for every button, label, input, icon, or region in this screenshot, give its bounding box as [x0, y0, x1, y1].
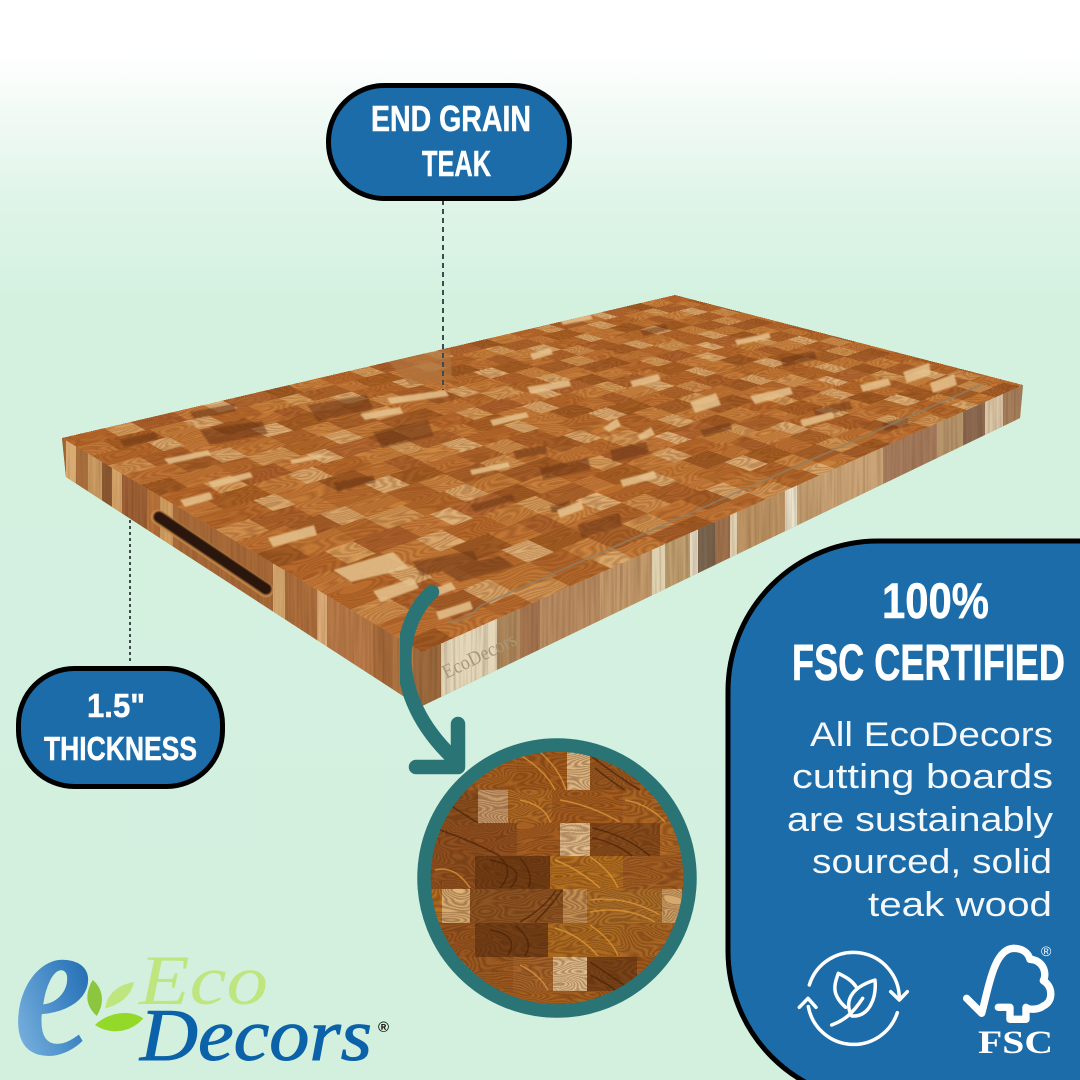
heading: [792, 573, 1065, 691]
body text: teak wood: [868, 886, 1052, 924]
logo: EcoDecors: ®: [378, 1019, 389, 1036]
body text: sourced, solid: [812, 843, 1052, 881]
callout: end grain teak: [326, 83, 572, 201]
body text: [787, 716, 1053, 924]
dotted leader: thickness: [129, 520, 131, 661]
logo: EcoDecors: [14, 950, 389, 1070]
icon: FSC logo: [967, 943, 1053, 1061]
heading: 100%: [882, 573, 989, 629]
callout: thickness: [16, 666, 225, 789]
icon: recycling leaf: [799, 952, 907, 1044]
juice groove: [447, 383, 985, 622]
body text: are sustainably: [787, 801, 1053, 839]
callout: end grain teak: TEAK: [422, 143, 491, 184]
board surface detail: [120, 314, 986, 623]
brand stamp on board: EcoDecors: [439, 629, 520, 683]
body text: All EcoDecors: [810, 716, 1053, 754]
callout: thickness: 1.5": [87, 687, 145, 724]
icon: FSC logo: FSC: [978, 1025, 1053, 1061]
close-up wood circle: [417, 738, 697, 1018]
board side faces: [62, 385, 1023, 706]
arrow: board corner to close-up: [400, 584, 466, 774]
icon: FSC logo: ®: [1041, 943, 1052, 959]
board top surface: [62, 295, 1022, 652]
icon: handle slot: [158, 517, 266, 590]
body text: cutting boards: [792, 758, 1053, 796]
logo leaves: [87, 980, 143, 1031]
panel: FSC certified: [726, 538, 1080, 1080]
dotted leader: end grain: [442, 201, 444, 390]
inner back edge: [387, 349, 452, 385]
callout: end grain teak: END GRAIN: [371, 98, 531, 139]
